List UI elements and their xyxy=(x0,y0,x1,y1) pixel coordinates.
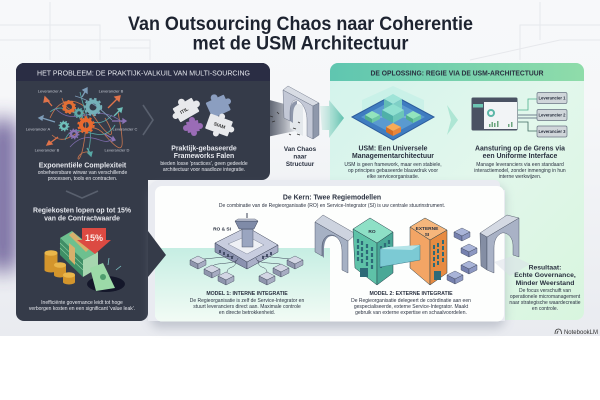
arrows: chaos directions xyxy=(39,88,126,156)
icon: model 2 buildings: RO xyxy=(368,229,376,235)
title xyxy=(128,14,473,54)
text: model 1: De Regieorganisatie is zelf de Service-Integrator en xyxy=(190,298,304,304)
text: model 2: MODEL 2: EXTERNE INTEGRATIE xyxy=(369,291,453,297)
text: frameworks falen: architectuur voor naadloze integratie. xyxy=(163,167,245,173)
text: inefficiente governance xyxy=(29,300,135,312)
label: van chaos naar structuur: Van Chaos xyxy=(284,146,317,153)
label: van chaos naar structuur: naar xyxy=(293,154,307,160)
panel: de kern xyxy=(148,180,530,328)
chevron down xyxy=(66,191,98,198)
text: aansturing: een Uniforme Interface xyxy=(483,153,558,160)
text: frameworks falen: bieden losse 'practices', geen gedeelde xyxy=(160,161,248,167)
text: frameworks falen xyxy=(160,146,248,173)
arrow teal xyxy=(320,100,344,138)
text: model 1: MODEL 1: INTERNE INTEGRATIE xyxy=(206,291,288,297)
icon: model 2 buildings xyxy=(315,215,530,285)
text: inefficiente governance: Inefficiënte governance leidt tot hoge xyxy=(41,300,123,306)
text: resultaat: operationele micromanagement xyxy=(510,294,581,300)
RO building xyxy=(353,229,377,285)
text: inefficiente governance: verborgen kosten en een significant 'value leak'. xyxy=(29,306,135,312)
text: model 2: gebruik van externe expertise en schaalvoordelen. xyxy=(355,310,467,316)
icon: dashboard with suppliers: Leverancier 2 xyxy=(538,112,566,118)
text: model 2: De Regieorganisatie delegeert de coördinatie aan een xyxy=(351,298,471,304)
labels: leveranciers chaos: Leverancier A xyxy=(38,88,63,94)
text: resultaat xyxy=(509,264,581,312)
icon: dashboard with suppliers: Leverancier 3 xyxy=(538,129,566,134)
labels: leveranciers chaos: Leverancier C xyxy=(113,126,138,132)
heading: de kern: De Kern: Twee Regiemodellen xyxy=(283,194,381,202)
text: model 1: en directe betrokkenheid. xyxy=(219,310,275,316)
icon: puzzle pieces xyxy=(167,89,238,142)
text: usm xyxy=(344,146,442,180)
left arch xyxy=(322,231,347,272)
notch pointer xyxy=(148,231,166,277)
text: usm: elke serviceorganisatie. xyxy=(367,174,419,180)
beam: chaos to arch xyxy=(262,98,300,138)
Externe SI building xyxy=(410,227,430,285)
cubes xyxy=(454,228,470,241)
text: exponentiele complexiteit xyxy=(38,162,127,182)
icon: model 1 control tower: RO & SI xyxy=(213,226,232,232)
icon: money leak xyxy=(44,228,125,292)
icon: dashboard with suppliers: Leverancier 1 xyxy=(538,96,566,100)
panel: het probleem xyxy=(16,63,270,321)
logo: notebooklm xyxy=(555,329,598,336)
text: exponentiele complexiteit: Exponentiële Complexiteit xyxy=(39,162,127,170)
chevron right xyxy=(143,105,153,135)
text: exponentiele complexiteit: processen, tools en contracten. xyxy=(48,176,117,182)
text: frameworks falen: Frameworks Falen xyxy=(174,153,234,160)
text: resultaat: De focus verschuift van xyxy=(519,288,571,294)
text: aansturing: Aansturing op de Grens via xyxy=(475,146,565,152)
panel header: de oplossing xyxy=(330,63,584,81)
panel header: het probleem xyxy=(16,63,270,81)
icon: tangled gears xyxy=(39,88,126,159)
icon: model 2 buildings: EXTERNE xyxy=(416,226,439,232)
panel header: de oplossing: DE OPLOSSING: REGIE VIA DE USM-ARCHITECTUUR xyxy=(370,68,544,78)
icon: money leak: 15% xyxy=(85,233,103,243)
labels: leveranciers chaos: Leverancier B xyxy=(35,148,60,152)
text: resultaat: Resultaat: xyxy=(529,264,561,272)
text: resultaat: naar strategische waardecreatie xyxy=(509,300,581,306)
icon: puzzle pieces: SIAM xyxy=(213,121,226,131)
labels: leveranciers chaos: Leverancier B xyxy=(99,88,124,94)
text: exponentiele complexiteit: onbeheersbare wirwar van verschillende xyxy=(38,170,127,176)
text: model 1: stuurt leveranciers direct aan. Maximale controle xyxy=(193,304,301,310)
text: aansturing: Manage leveranciers via een standaard xyxy=(476,162,564,168)
text: frameworks falen: Praktijk-gebaseerde xyxy=(171,146,237,152)
labels: leveranciers chaos xyxy=(26,88,138,152)
arch: chaos to structuur xyxy=(270,86,319,168)
icon: model 2 buildings: SI xyxy=(425,232,430,238)
text: aansturing: interne werkwijzen. xyxy=(499,174,541,180)
text: regiekosten: van de Contractwaarde xyxy=(44,216,120,222)
chevron right teal xyxy=(447,105,458,135)
heading: de kern: De combinatie van de Regieorganisatie (RO) en Service-Integrator (SI) is uw centrale stuurinstrument. xyxy=(219,203,445,209)
text: model 2: gespecialiseerde, externe Service-Integrator. Maakt xyxy=(354,304,469,310)
labels: leveranciers chaos: Leverancier A xyxy=(26,126,51,132)
glass bridge xyxy=(380,245,420,267)
heading: de kern xyxy=(219,194,445,209)
text: regiekosten xyxy=(33,208,131,222)
panel: de oplossing xyxy=(330,63,584,320)
text: aansturing: interactiemodel, zonder inmenging in hun xyxy=(474,168,566,174)
label: van chaos naar structuur: Structuur xyxy=(286,161,315,168)
text: resultaat: Minder Weerstand xyxy=(516,280,574,287)
text: aansturing xyxy=(474,146,566,180)
label: van chaos naar structuur xyxy=(284,146,317,168)
text: usm: USM is geen framework, maar een stabiele, xyxy=(344,162,442,168)
text: usm: Managementarchitectuur xyxy=(352,153,434,160)
icon: dashboard with suppliers xyxy=(472,92,567,137)
right arch xyxy=(480,233,487,270)
title: Van Outsourcing Chaos naar Coherentie xyxy=(128,14,473,35)
text: regiekosten: Regiekosten lopen op tot 15% xyxy=(33,208,131,214)
text: model 1 xyxy=(190,291,304,316)
logo: notebooklm: NotebookLM xyxy=(564,330,598,336)
text: usm: USM: Een Universele xyxy=(359,146,428,152)
panel header: het probleem: HET PROBLEEM: DE PRAKTIJK-VALKUIL VAN MULTI-SOURCING xyxy=(37,68,250,78)
icon: puzzle pieces: ITIL xyxy=(179,106,190,116)
icon: usm platform xyxy=(352,86,434,140)
labels: leveranciers chaos: Leverancier D xyxy=(105,148,130,152)
icon: model 1 control tower xyxy=(190,213,303,285)
title: met de USM Architectuur xyxy=(192,34,409,54)
text: model 2 xyxy=(351,291,471,316)
text: resultaat: en controle. xyxy=(532,306,558,312)
text: resultaat: Echte Governance, xyxy=(514,272,576,279)
text: usm: op principes gebaseerde blauwdruk voor xyxy=(348,168,438,174)
